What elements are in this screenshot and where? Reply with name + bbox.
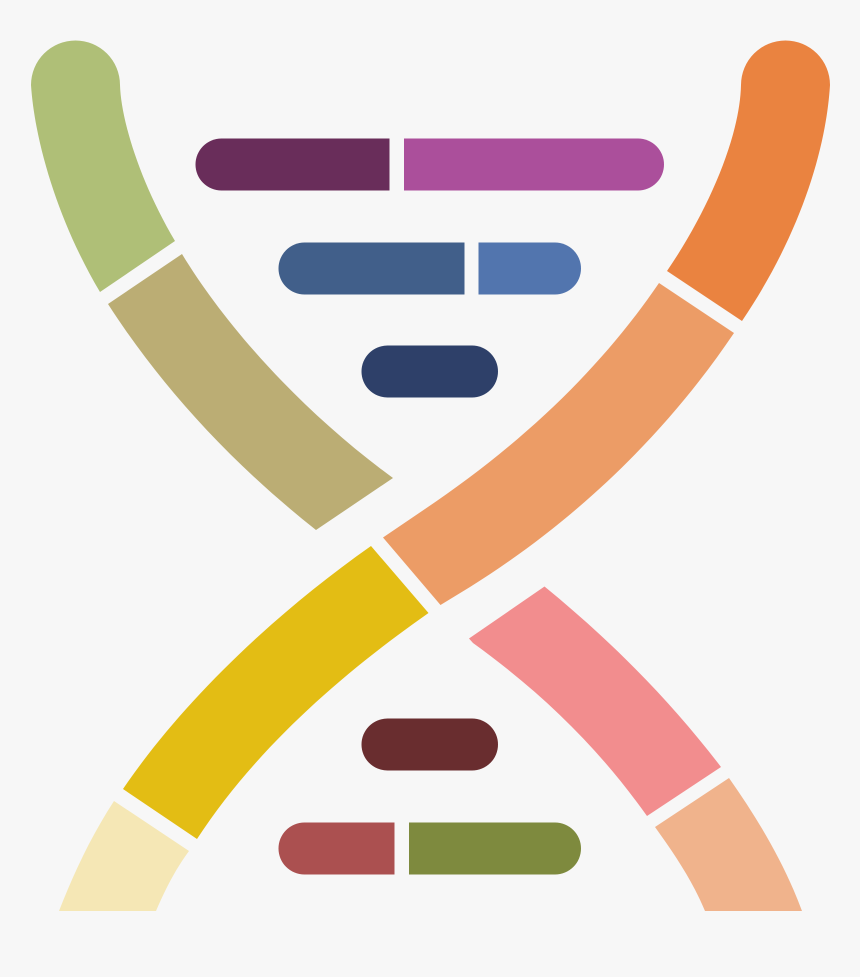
base pair: blue [279,242,581,294]
strand segment: yellow [123,546,428,839]
base pair: maroon [362,718,498,770]
bar: magenta [404,138,664,190]
bar: olive [409,822,581,874]
left strand [31,40,802,911]
bar: mid blue [478,242,581,294]
base pair: navy [362,346,498,398]
strand segment: pink [469,586,721,816]
right strand [59,40,830,911]
strand segment: pale yellow [59,801,189,911]
strand segment: peach [655,778,802,911]
base pair: red and olive [279,822,581,874]
bar: dark blue [279,242,464,294]
base pair: purple [196,138,664,190]
strand segment: tan [108,254,393,530]
strand segment: green cap [31,40,175,292]
strand segment: light orange [383,283,734,605]
bar: red [279,822,394,874]
bar: dark purple [196,138,390,190]
strand segment: orange cap [667,40,830,321]
